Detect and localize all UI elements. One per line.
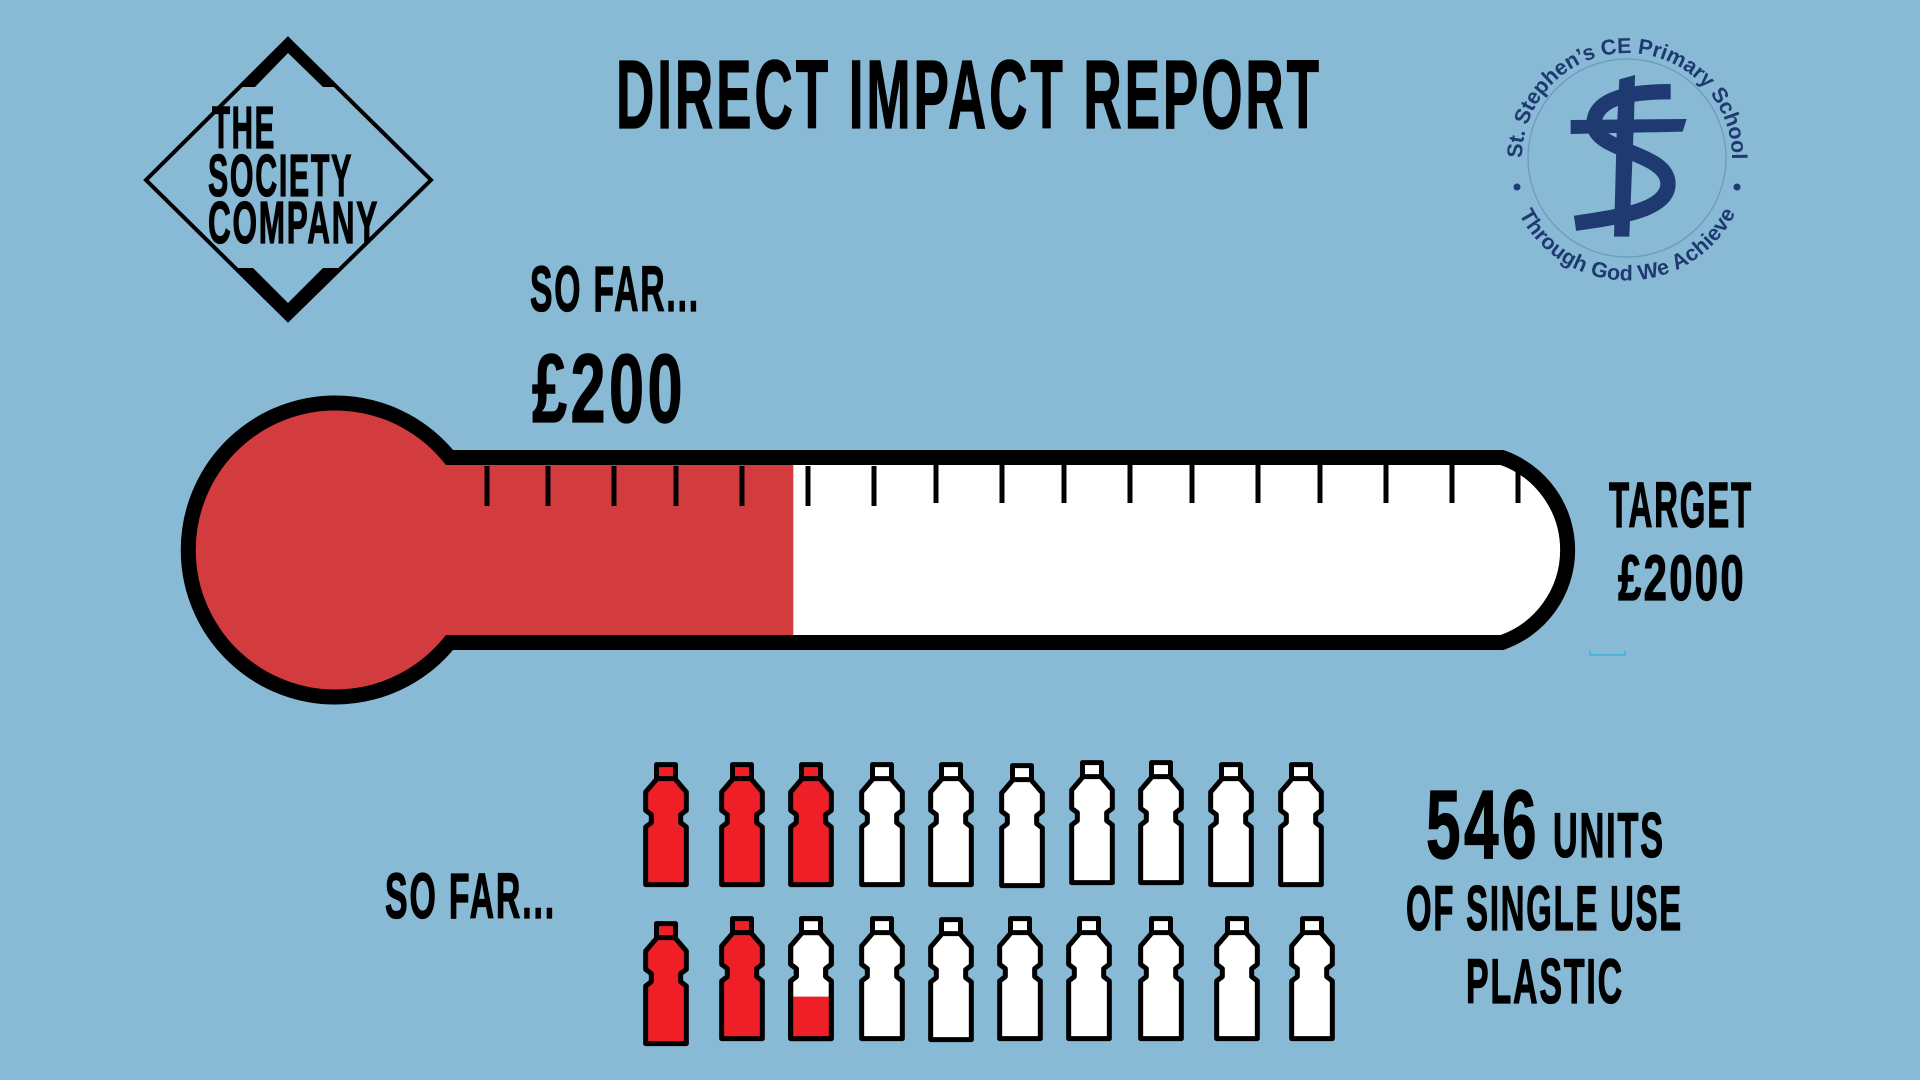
row 1 bottles — [646, 763, 1321, 886]
selection bracket — [1590, 651, 1625, 655]
label: so far amount raised: SO FAR... — [530, 253, 700, 325]
logo: The Society Company: THE — [212, 95, 276, 161]
plastic units statement: UNITS — [1553, 801, 1665, 871]
logo: The Society Company: SOCIETY — [208, 143, 353, 209]
bottle chart: units of plastic — [646, 763, 1332, 1044]
label: so far plastic: SO FAR... — [385, 860, 556, 932]
thermometer — [188, 403, 1568, 697]
plastic units statement: 546 — [1426, 770, 1540, 879]
title: DIRECT IMPACT REPORT — [616, 40, 1322, 149]
logo: St. Stephen's CE Primary School: St. Stephen’s CE Primary School — [1507, 38, 1748, 158]
logo: The Society Company — [146, 37, 431, 322]
amount raised: £200 — [532, 334, 686, 443]
logo: The Society Company: COMPANY — [208, 190, 379, 256]
plastic units statement: PLASTIC — [1466, 947, 1624, 1017]
label: target: TARGET — [1609, 469, 1753, 541]
logo: St. Stephen's CE Primary School — [1507, 38, 1748, 281]
target amount: £2000 — [1618, 542, 1746, 614]
plastic units statement — [1406, 770, 1683, 1017]
logo: St. Stephen's CE Primary School: Through God We Achieve — [1521, 206, 1734, 281]
row 2 bottles — [646, 919, 1332, 1044]
